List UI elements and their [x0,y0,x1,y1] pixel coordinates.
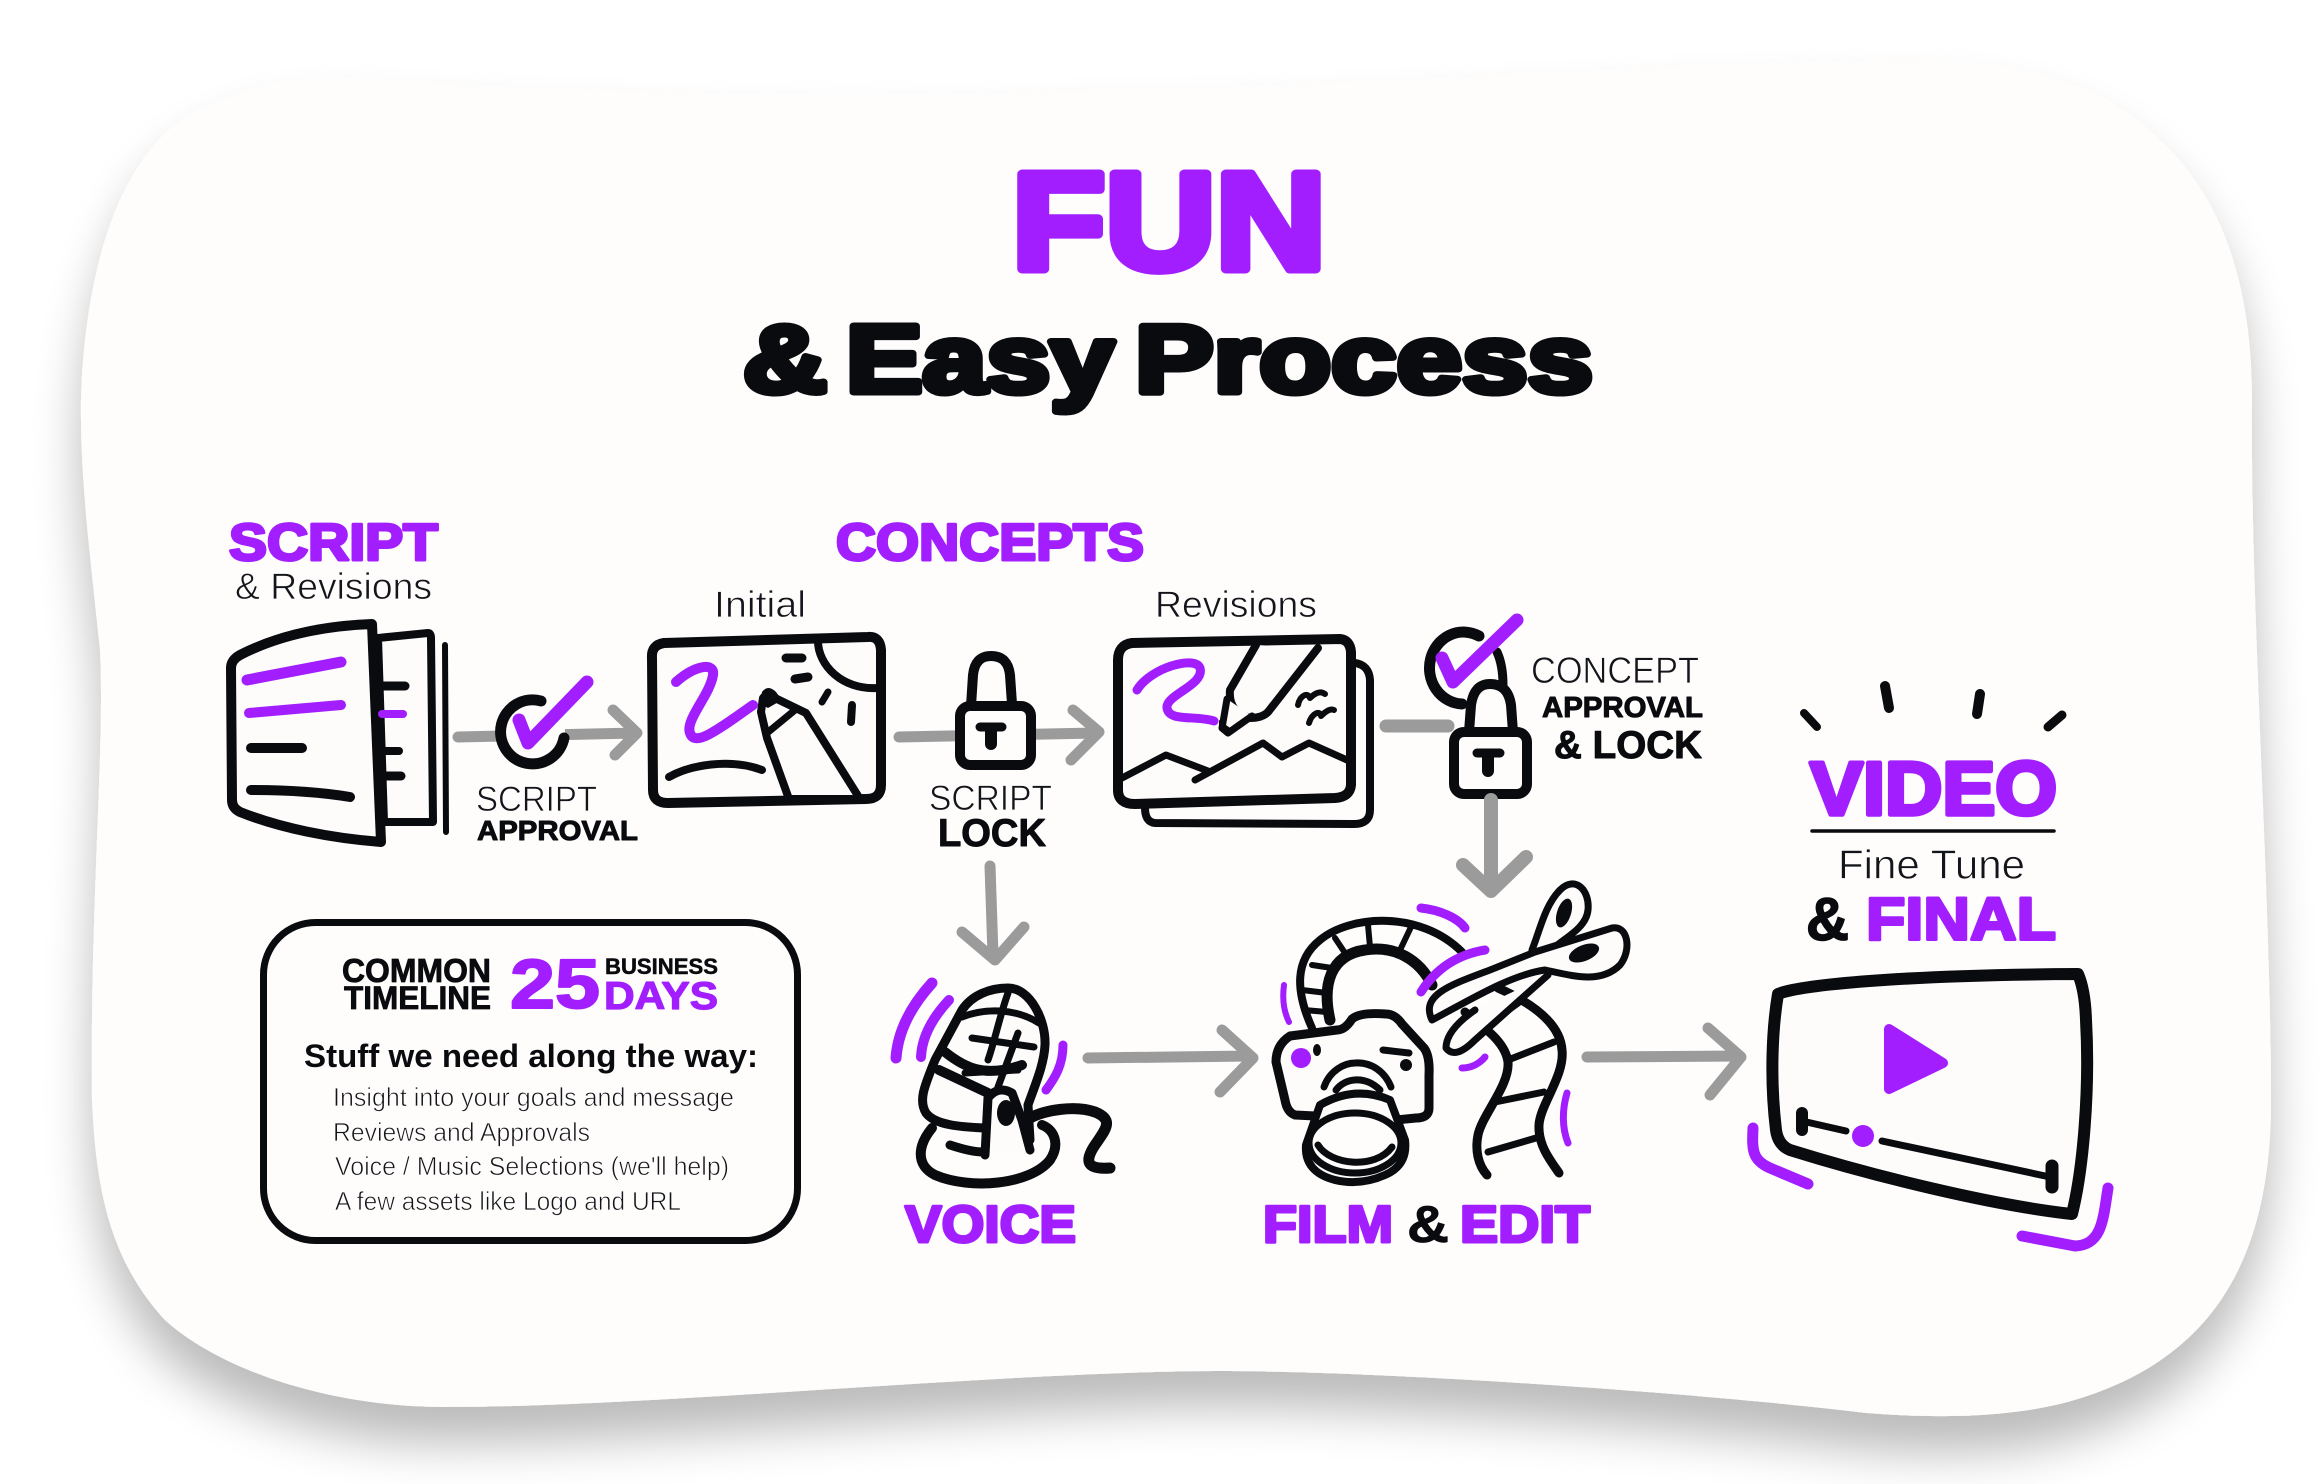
label: FILM & EDIT [1263,1196,1590,1254]
label: CONCEPT APPROVAL & LOCK: CONCEPT [1531,650,1699,691]
card: common timeline: BUSINESS [605,954,718,979]
icon: initial concept sketch [652,637,881,803]
icon: script lock [960,656,1031,765]
card: common timeline [264,922,798,1240]
icon: concept approval and lock [1429,620,1527,794]
card: common timeline: 25 [510,945,600,1023]
icon: script approval check [501,682,587,764]
label: CONCEPT APPROVAL & LOCK: APPROVAL [1542,692,1703,724]
label: SCRIPT APPROVAL [476,780,638,846]
label: FILM & EDIT: & [1407,1196,1449,1254]
heading: SCRIPT & Revisions [229,514,438,607]
heading: VIDEO Fine Tune & FINAL [1806,746,2057,953]
arrow: voice to film [1088,1030,1253,1092]
heading: VIDEO Fine Tune & FINAL: FINAL [1866,886,2056,952]
arrow: film to video [1587,1028,1741,1095]
heading: VIDEO Fine Tune & FINAL: VIDEO [1810,746,2057,830]
label: Initial: Initial [714,584,806,625]
card: common timeline: Reviews and Approvals [333,1117,590,1147]
card: common timeline: DAYS [604,975,718,1018]
label: SCRIPT LOCK [929,779,1052,855]
heading: VIDEO Fine Tune & FINAL: Fine Tune [1838,842,2025,888]
icon: script document [231,624,446,842]
card: common timeline: COMMON [342,952,491,989]
icon: microphone [896,983,1110,1183]
title: & Easy Process: & [743,306,827,413]
label: SCRIPT LOCK: SCRIPT [929,779,1052,818]
label: SCRIPT APPROVAL: APPROVAL [477,815,638,846]
label: CONCEPT APPROVAL & LOCK: & LOCK [1554,724,1702,767]
title: & Easy Process [743,306,1593,413]
label: SCRIPT LOCK: LOCK [938,812,1046,855]
arrow: script lock to voice [962,866,1024,960]
heading: CONCEPTS: CONCEPTS [836,514,1144,572]
label: FILM & EDIT: EDIT [1460,1196,1590,1254]
heading: SCRIPT & Revisions: SCRIPT [229,514,438,572]
heading: SCRIPT & Revisions: & Revisions [235,566,432,607]
card: common timeline: Stuff we need along the way: [304,1038,758,1074]
icon: video player [1753,974,2108,1246]
arrow: initial concept to revisions [899,710,1099,760]
card: common timeline: TIMELINE [344,980,491,1016]
heading: VIDEO Fine Tune & FINAL: & [1806,886,1849,953]
title: & Easy Process: Process [1135,306,1593,413]
label: Revisions: Revisions [1155,584,1317,625]
label: CONCEPT APPROVAL & LOCK [1531,650,1703,767]
icon: film camera and scissors [1276,884,1627,1182]
card: common timeline: Insight into your goals and message [333,1082,734,1112]
card: common timeline: A few assets like Logo and URL [335,1186,681,1216]
arrow: concept lock to film [1463,800,1526,891]
title: FUN: FUN [1012,145,1326,299]
card: common timeline: Voice / Music Selections (we'll help) [335,1151,729,1181]
title: & Easy Process: Easy [846,306,1114,413]
arrow: script to approval [458,710,637,755]
icon: concept revisions sketch [1118,639,1370,824]
icon: excitement rays [1804,686,2062,727]
label: VOICE: VOICE [905,1196,1076,1254]
label: SCRIPT APPROVAL: SCRIPT [476,780,597,819]
label: FILM & EDIT: FILM [1263,1196,1393,1254]
arrow: revisions to concept lock [1386,720,1448,732]
